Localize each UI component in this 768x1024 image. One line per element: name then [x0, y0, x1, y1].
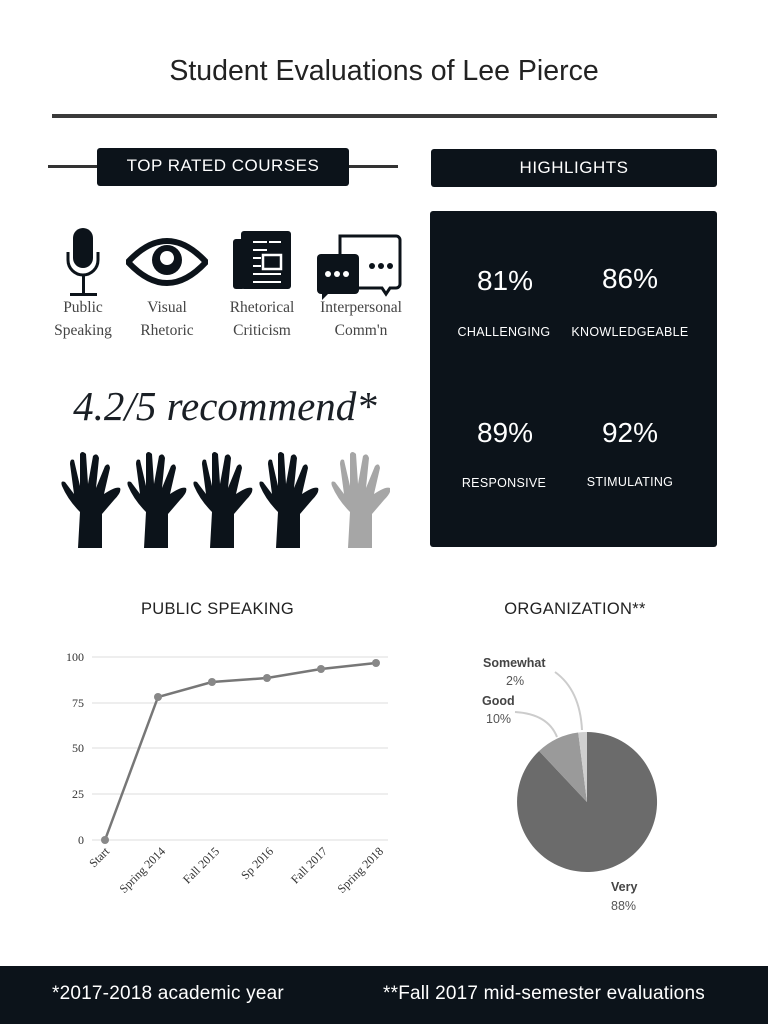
pie chart: Somewhat	[483, 656, 546, 670]
panel: highlights stats	[430, 211, 717, 547]
label: rhetorical criticism: Criticism	[233, 322, 291, 339]
line chart: 25	[72, 787, 84, 801]
label: interpersonal: Interpersonal	[320, 299, 402, 316]
footer: **Fall 2017 mid-semester evaluations	[383, 983, 705, 1004]
pie chart: Good	[482, 694, 515, 708]
panel: highlights stats: CHALLENGING	[458, 325, 550, 339]
line chart: 0	[78, 833, 84, 847]
label: visual rhetoric: Rhetoric	[140, 322, 194, 339]
heading: top rated courses: TOP RATED COURSES	[127, 156, 319, 175]
icon row: hands	[61, 452, 390, 548]
icon: newspaper	[233, 231, 291, 289]
line chart: 50	[72, 741, 84, 755]
label: public speaking	[54, 299, 112, 339]
recommend text: 4.2/5 recommend*	[73, 383, 377, 429]
line chart: 75	[72, 696, 84, 710]
line chart: Spring 2014	[116, 844, 168, 896]
label: interpersonal: Comm'n	[335, 322, 387, 339]
pie chart: Very	[611, 880, 637, 894]
panel: highlights stats: 81%	[477, 265, 533, 296]
line chart	[66, 650, 388, 896]
panel: highlights stats: 92%	[602, 417, 658, 448]
panel: highlights stats: 86%	[602, 263, 658, 294]
label: visual rhetoric: Visual	[147, 299, 187, 316]
line chart: Fall 2015	[180, 844, 222, 886]
panel: highlights stats: 89%	[477, 417, 533, 448]
label: rhetorical criticism: Rhetorical	[230, 299, 294, 316]
label: rhetorical criticism	[230, 299, 294, 339]
line chart: Sp 2016	[238, 844, 276, 882]
chart title: organization: ORGANIZATION**	[504, 600, 646, 618]
heading: highlights: HIGHLIGHTS	[520, 158, 628, 177]
icon: microphone	[66, 228, 100, 296]
label: public speaking: Speaking	[54, 322, 112, 339]
footer: *2017-2018 academic year	[52, 983, 284, 1004]
pie chart	[482, 656, 658, 913]
title: Student Evaluations of Lee Pierce	[169, 55, 599, 87]
pie chart: 88%	[611, 899, 636, 913]
icon: chat bubbles	[317, 234, 402, 300]
label: visual rhetoric	[140, 299, 194, 339]
chart title: public speaking: PUBLIC SPEAKING	[141, 600, 294, 618]
label: interpersonal	[320, 299, 402, 339]
line chart: Spring 2018	[334, 844, 386, 896]
heading: top rated courses	[48, 148, 398, 186]
panel: highlights stats: STIMULATING	[587, 475, 673, 489]
heading: highlights	[431, 149, 717, 187]
panel: highlights stats: RESPONSIVE	[462, 476, 546, 490]
line chart: Start	[86, 844, 113, 870]
icon: eye	[126, 238, 208, 286]
panel: highlights stats: KNOWLEDGEABLE	[571, 325, 689, 339]
label: public speaking: Public	[63, 299, 103, 316]
pie chart: 2%	[506, 674, 524, 688]
footer	[0, 966, 768, 1024]
pie chart: 10%	[486, 712, 511, 726]
line chart: 100	[66, 650, 84, 664]
line chart: Fall 2017	[288, 844, 330, 886]
